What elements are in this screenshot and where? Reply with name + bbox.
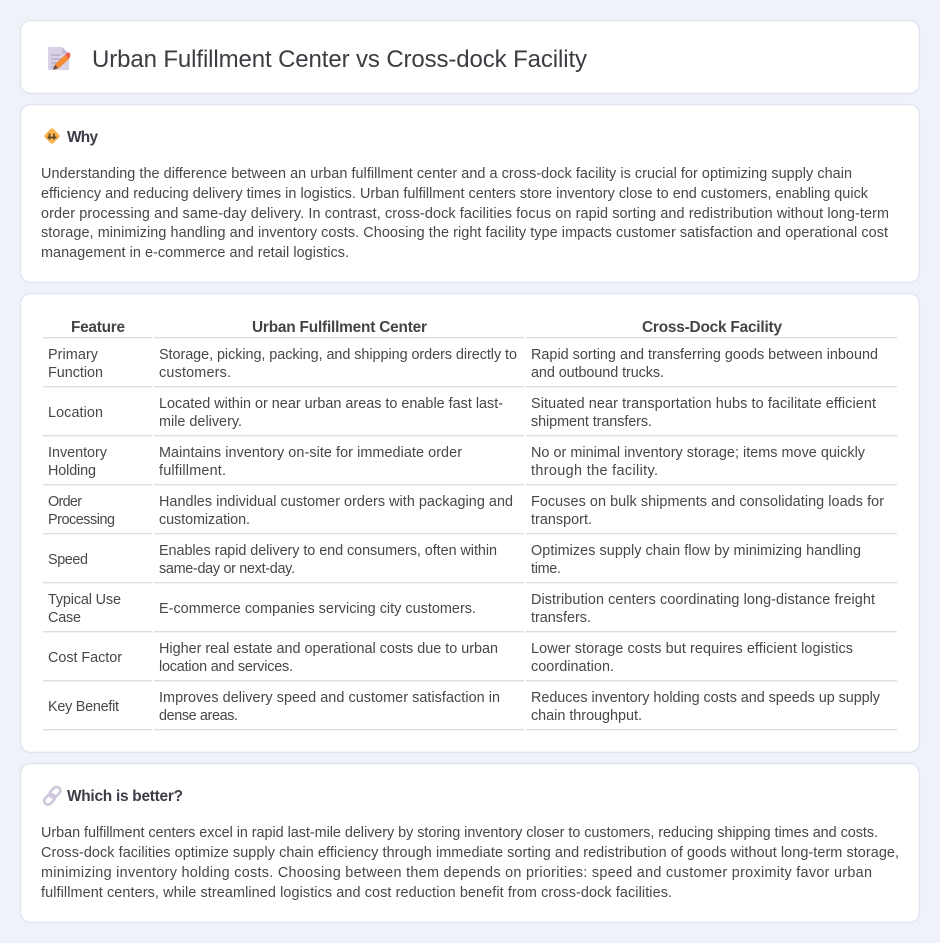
heading: why: Why [67, 129, 98, 146]
text block: which is better paragraph: minimizing inventory holding costs. Choosing between them depends on priorities: speed and customer proximity favor urban [41, 865, 872, 881]
row: inventory holding: fulfillment. [159, 463, 226, 479]
row: location: shipment transfers. [531, 414, 652, 430]
row: cost factor: Higher real estate and operational costs due to urban [159, 641, 498, 657]
row: order processing: Focuses on bulk shipments and consolidating loads for [531, 494, 884, 510]
text block: why paragraph: management in e-commerce and retail logistics. [41, 245, 349, 261]
row: inventory holding: through the facility. [531, 463, 658, 479]
text block: why paragraph: efficiency and reducing delivery times in logistics. Urban fulfillment centers store inventory close to end customers, enabling quick [41, 186, 869, 202]
icon: chain link [43, 785, 62, 806]
row: key benefit [43, 690, 897, 730]
row: cost factor: coordination. [531, 659, 614, 675]
row: primary function: Storage, picking, packing, and shipping orders directly to [159, 347, 517, 363]
text block: which is better paragraph [41, 825, 899, 901]
row: primary function: Function [48, 365, 103, 381]
row: order processing: transport. [531, 512, 592, 528]
text block: which is better paragraph: Urban fulfillment centers excel in rapid last-mile delivery by storing inventory closer to customers, reducing shipping times and costs. [41, 825, 878, 841]
table header: Urban Fulfillment Center [252, 319, 427, 336]
row: key benefit: dense areas. [159, 708, 238, 724]
title: Urban Fulfillment Center vs Cross-dock Facility [92, 46, 587, 73]
row: typical use case: transfers. [531, 610, 591, 626]
text block: which is better paragraph: Cross-dock facilities optimize supply chain efficiency through immediate sorting and redistribution of goods without long-term storage, [41, 845, 899, 861]
row: primary function: customers. [159, 365, 231, 381]
row: cost factor [43, 641, 897, 681]
row: key benefit: chain throughput. [531, 708, 642, 724]
text block: which is better paragraph: fulfillment centers, while streamlined logistics and cost reduction benefit from cross-dock facilities. [41, 885, 672, 901]
panel: which is better [20, 764, 920, 922]
row: speed: Speed [48, 552, 88, 568]
text block: why paragraph: Understanding the difference between an urban fulfillment center and a cross-dock facility is crucial for optimizing supply chain [41, 166, 852, 182]
row: primary function: Rapid sorting and transferring goods between inbound [531, 347, 878, 363]
icon: orange diamond sign [44, 128, 60, 144]
text block: why paragraph: order processing and same-day delivery. In contrast, cross-dock facilities focus on rapid sorting and redistribution without long-term [41, 206, 889, 222]
row: speed: Enables rapid delivery to end consumers, often within [159, 543, 497, 559]
icon: document with pencil [48, 47, 70, 70]
row: order processing: Processing [48, 512, 115, 528]
row: inventory holding: Holding [48, 463, 96, 479]
row: inventory holding: No or minimal inventory storage; items move quickly [531, 445, 866, 461]
row: order processing: Order [48, 494, 82, 510]
row: typical use case: Case [48, 610, 81, 626]
table header: Cross-Dock Facility [642, 319, 782, 336]
row: key benefit: Key Benefit [48, 699, 119, 715]
row: inventory holding [43, 445, 897, 485]
row: speed: Optimizes supply chain flow by minimizing handling [531, 543, 861, 559]
row: speed: time. [531, 561, 561, 577]
text block: why paragraph [41, 166, 889, 261]
row: cost factor: Cost Factor [48, 650, 122, 666]
row: order processing [43, 494, 897, 534]
heading: which is better: Which is better? [67, 788, 183, 805]
row: key benefit: Reduces inventory holding costs and speeds up supply [531, 690, 881, 706]
row: typical use case: Typical Use [48, 592, 121, 608]
row: location: Situated near transportation hubs to facilitate efficient [531, 396, 876, 412]
row: key benefit: Improves delivery speed and customer satisfaction in [159, 690, 500, 706]
panel: comparison table [20, 294, 920, 752]
row: location: Located within or near urban areas to enable fast last- [159, 396, 503, 412]
row: speed [43, 543, 897, 583]
row: primary function: Primary [48, 347, 99, 363]
row: inventory holding: Inventory [48, 445, 108, 461]
row: order processing: Handles individual customer orders with packaging and [159, 494, 513, 510]
row: primary function: and outbound trucks. [531, 365, 664, 381]
table header: Feature [71, 319, 125, 336]
row: order processing: customization. [159, 512, 250, 528]
row: typical use case: E-commerce companies servicing city customers. [159, 601, 476, 617]
row: typical use case [43, 592, 897, 632]
row: cost factor: Lower storage costs but requires efficient logistics [531, 641, 853, 657]
row: location [43, 396, 897, 436]
row: location: Location [48, 405, 103, 421]
row: typical use case: Distribution centers coordinating long-distance freight [531, 592, 875, 608]
panel: why [20, 104, 920, 282]
text block: why paragraph: storage, minimizing handling and inventory costs. Choosing the right facility type impacts customer satisfaction and operational cost [41, 225, 888, 241]
row: primary function [43, 347, 897, 387]
panel: title header [20, 20, 920, 94]
table header [43, 319, 897, 338]
row: speed: same-day or next-day. [159, 561, 295, 577]
row: inventory holding: Maintains inventory on-site for immediate order [159, 445, 462, 461]
row: cost factor: location and services. [159, 659, 293, 675]
row: location: mile delivery. [159, 414, 242, 430]
